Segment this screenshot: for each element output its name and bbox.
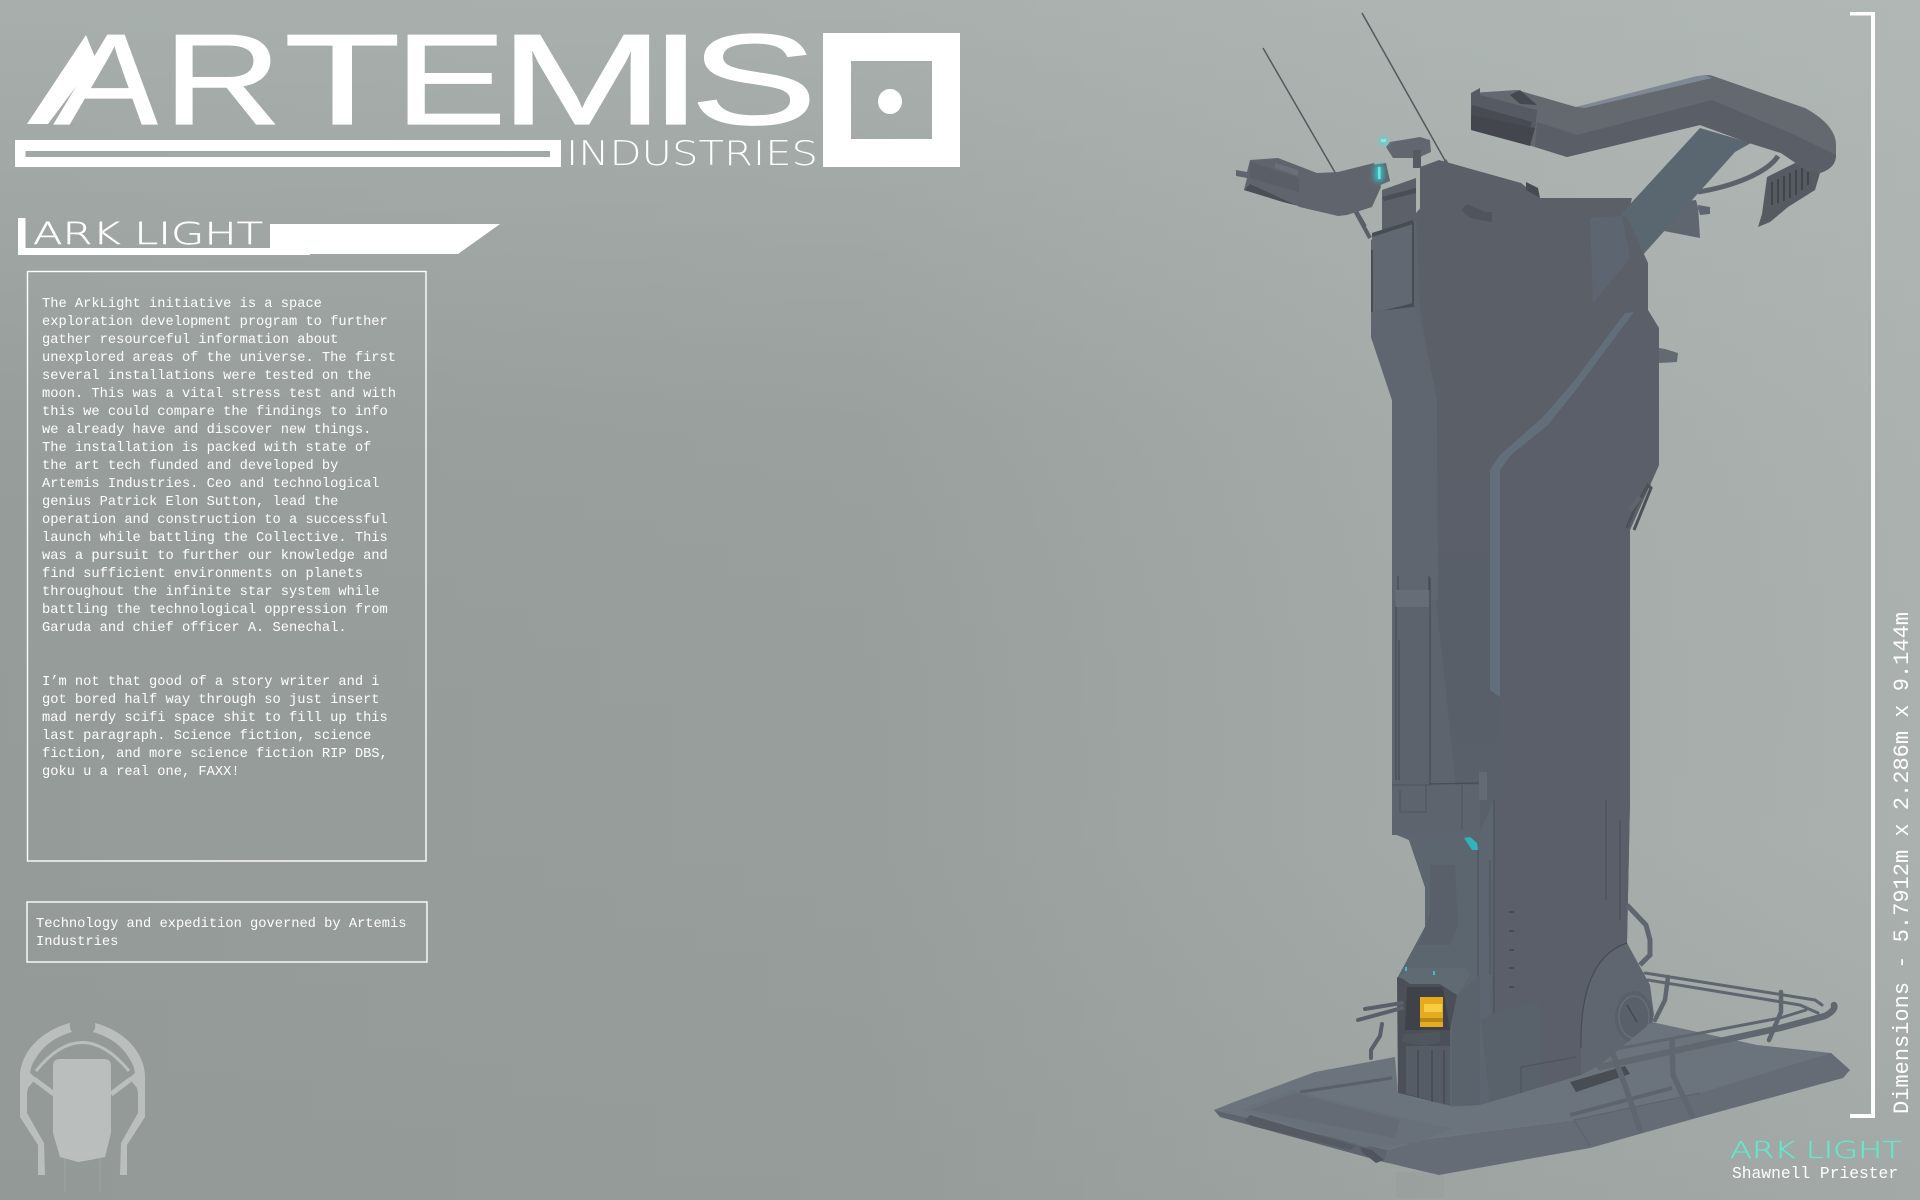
story paragraph two: I’m not that good of a story writer and i <box>42 674 380 690</box>
cyan lights <box>1372 138 1390 186</box>
right panel diagonal bevel <box>1490 312 1634 700</box>
tower shoulder chamfer <box>1590 216 1630 303</box>
door with yellow light <box>1397 967 1480 1105</box>
story paragraph one: this we could compare the findings to info <box>42 404 388 420</box>
side latch <box>1627 485 1651 530</box>
logo wordmark ARTEMIS <box>27 7 817 152</box>
hoop and grate <box>1698 156 1820 227</box>
story paragraph one: Garuda and chief officer A. Senechal. <box>42 620 347 636</box>
story paragraph one: gather resourceful information about <box>42 332 338 348</box>
lower column <box>1392 800 1494 1107</box>
story paragraph one: battling the technological oppression from <box>42 602 388 618</box>
note text: Technology and expedition governed by Artemis <box>36 916 406 932</box>
dimensions label: Dimensions - 5.7912m x 2.286m x 9.144m <box>1890 612 1915 1114</box>
story paragraph one: The installation is packed with state of <box>42 440 371 456</box>
logo wordmark ARTEMIS: R <box>163 8 282 152</box>
story paragraph one: operation and construction to a successful <box>42 512 388 528</box>
logo square emblem <box>823 33 960 167</box>
big curved arm <box>1471 75 1836 173</box>
right panel <box>1500 312 1659 1105</box>
note text: Industries <box>36 934 118 950</box>
logo underline bar <box>15 140 561 167</box>
base left lip <box>1214 1110 1388 1162</box>
story paragraph one: find sufficient environments on planets <box>42 566 363 582</box>
arm strut <box>1622 128 1751 257</box>
rear pipe <box>1627 905 1650 965</box>
logo wordmark ARTEMIS: T <box>284 8 401 152</box>
story paragraph one: exploration development program to further <box>42 314 388 330</box>
logo subtitle INDUSTRIES: INDUSTRIES <box>566 134 818 174</box>
tower top-left panel <box>1371 178 1492 316</box>
back wedge and turret <box>1386 137 1632 240</box>
story paragraph two: mad nerdy scifi space shit to fill up this <box>42 710 388 726</box>
story paragraph one: unexplored areas of the universe. The first <box>42 350 396 366</box>
story paragraph one: launch while battling the Collective. This <box>42 530 388 546</box>
story paragraph one: The ArkLight initiative is a space <box>42 296 322 312</box>
base plate <box>1214 1022 1850 1175</box>
tower notch and handle <box>1625 312 1678 363</box>
right lower column <box>1481 800 1620 1105</box>
logo wordmark ARTEMIS: E <box>395 8 506 152</box>
tower reflection <box>1396 1172 1444 1198</box>
story paragraph two: fiction, and more science fiction RIP DBS, <box>42 746 388 762</box>
panel: governance note <box>27 902 427 962</box>
antennas <box>1263 13 1471 238</box>
heading slanted bar <box>270 224 500 254</box>
heading text: ARK LIGHT <box>33 217 263 252</box>
logo wordmark ARTEMIS: I <box>649 7 703 151</box>
illustration: ark light tower <box>1214 13 1850 1198</box>
base front face <box>1384 1053 1850 1175</box>
logo: Artemis Industries <box>15 7 960 174</box>
lower arm back plate <box>1640 200 1710 238</box>
dimension bracket <box>1850 12 1875 1118</box>
logo wordmark ARTEMIS: M <box>499 8 664 152</box>
tower left lower shoulder <box>1371 307 1438 600</box>
tower front face <box>1416 192 1659 1105</box>
railing <box>1358 973 1834 1130</box>
heading: Ark Light <box>18 217 500 255</box>
story paragraph one: throughout the infinite star system while <box>42 584 380 600</box>
note frame <box>27 902 427 962</box>
wheel housing <box>1581 943 1654 1105</box>
left arm <box>1236 158 1381 216</box>
panel frame <box>28 272 426 861</box>
story paragraph one: Artemis Industries. Ceo and technological <box>42 476 380 492</box>
story paragraph one: moon. This was a vital stress test and with <box>42 386 396 402</box>
story paragraph two: got bored half way through so just insert <box>42 692 380 708</box>
base top surface <box>1214 1022 1850 1150</box>
tower left face <box>1371 192 1494 1105</box>
story paragraph two: last paragraph. Science fiction, science <box>42 728 371 744</box>
story paragraph two: goku u a real one, FAXX! <box>42 764 240 780</box>
credit: Ark Light title: ARK LIGHT <box>1730 1136 1902 1164</box>
icon: ark light silhouette <box>20 1023 145 1192</box>
story paragraph one: was a pursuit to further our knowledge and <box>42 548 388 564</box>
story paragraph one: we already have and discover new things. <box>42 422 371 438</box>
story paragraph one: the art tech funded and developed by <box>42 458 338 474</box>
heading bracket <box>18 218 310 255</box>
logo wordmark ARTEMIS: A <box>51 8 170 152</box>
story paragraph one: genius Patrick Elon Sutton, lead the <box>42 494 338 510</box>
credit: author: Shawnell Priester <box>1732 1164 1898 1183</box>
floor grating <box>1241 1090 1453 1147</box>
panel: story text <box>28 272 426 861</box>
logo wordmark ARTEMIS: S <box>690 8 817 152</box>
left side door <box>1392 576 1487 835</box>
yellow glow panel <box>1420 997 1443 1027</box>
story paragraph one: several installations were tested on the <box>42 368 371 384</box>
